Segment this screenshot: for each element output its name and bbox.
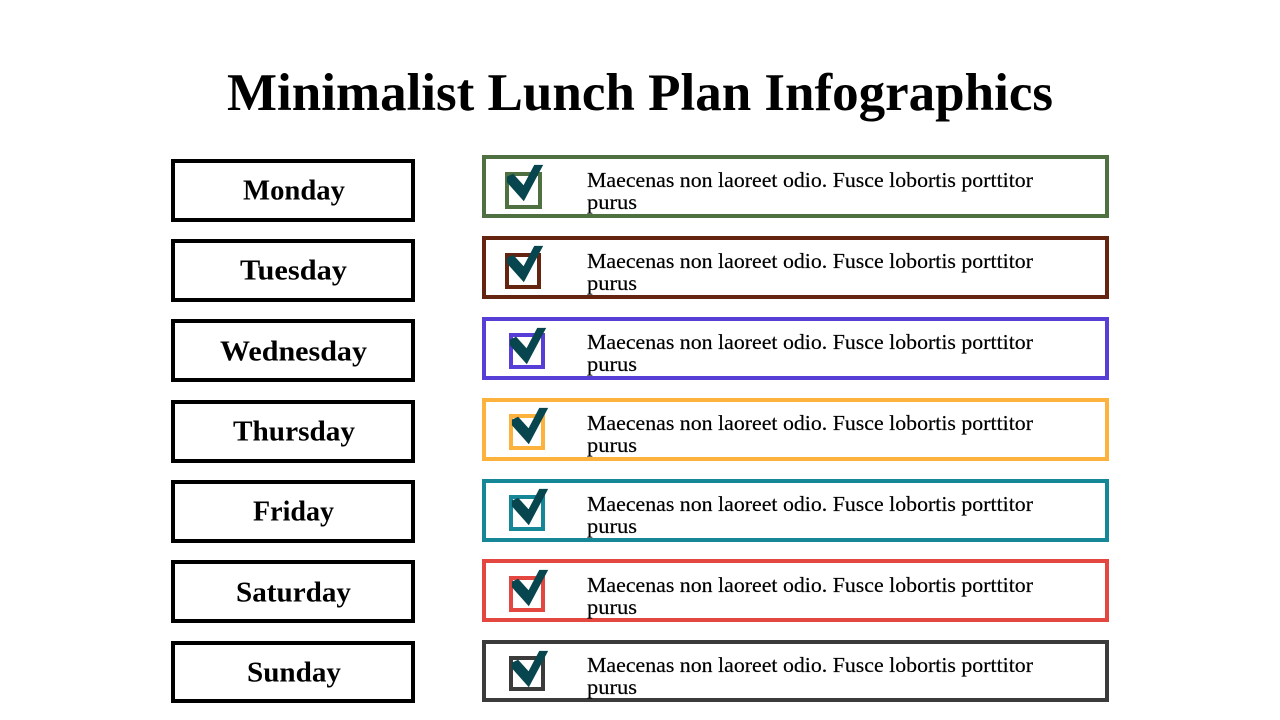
text: Sunday description: Maecenas non laoreet odio. Fusce lobortis porttitor <box>587 653 1033 677</box>
day label: Wednesday: Wednesday <box>220 336 368 368</box>
icon: Thursday checkbox <box>511 408 547 448</box>
day label: Sunday: Sunday <box>247 656 342 688</box>
day label: Sunday <box>173 643 413 701</box>
day label: Monday: Monday <box>243 174 345 206</box>
text: Thursday description: purus <box>587 433 637 457</box>
day label: Friday: Friday <box>253 496 334 528</box>
day label: Thursday: Thursday <box>233 416 355 448</box>
day label: Monday <box>173 161 413 220</box>
panel: Tuesday plan <box>484 238 1107 297</box>
day label: Saturday: Saturday <box>236 576 351 608</box>
icon: Sunday checkbox <box>511 652 547 689</box>
icon: Tuesday checkbox <box>507 246 542 287</box>
text: Sunday description: purus <box>587 675 637 699</box>
day label: Wednesday <box>173 321 413 380</box>
day label: Thursday <box>173 402 413 461</box>
title: Minimalist Lunch Plan Infographics <box>227 64 1053 122</box>
text: Wednesday description: Maecenas non laoreet odio. Fusce lobortis porttitor <box>587 330 1033 354</box>
text: Saturday description: Maecenas non laoreet odio. Fusce lobortis porttitor <box>587 573 1033 597</box>
day label: Saturday <box>173 562 413 621</box>
panel: Friday plan <box>484 481 1107 540</box>
text: Friday description: purus <box>587 514 637 538</box>
day label: Tuesday: Tuesday <box>240 254 348 286</box>
icon: Saturday checkbox <box>511 570 547 610</box>
panel: Saturday plan <box>484 561 1107 620</box>
day label: Friday <box>173 482 413 541</box>
text: Monday description: purus <box>587 190 637 214</box>
icon: Friday checkbox <box>511 490 547 529</box>
day label: Tuesday <box>173 241 413 300</box>
panel: Sunday plan <box>484 642 1107 700</box>
panel: Wednesday plan <box>484 319 1107 378</box>
text: Monday description: Maecenas non laoreet odio. Fusce lobortis porttitor <box>587 168 1033 192</box>
panel: Monday plan <box>484 157 1107 216</box>
icon: Monday checkbox <box>507 166 542 207</box>
text: Saturday description: purus <box>587 595 637 619</box>
text: Tuesday description: purus <box>587 271 637 295</box>
text: Tuesday description: Maecenas non laoreet odio. Fusce lobortis porttitor <box>587 249 1033 273</box>
text: Thursday description: Maecenas non laoreet odio. Fusce lobortis porttitor <box>587 411 1033 435</box>
icon: Wednesday checkbox <box>510 328 545 367</box>
text: Friday description: Maecenas non laoreet odio. Fusce lobortis porttitor <box>587 492 1033 516</box>
panel: Thursday plan <box>484 400 1107 459</box>
text: Wednesday description: purus <box>587 352 637 376</box>
